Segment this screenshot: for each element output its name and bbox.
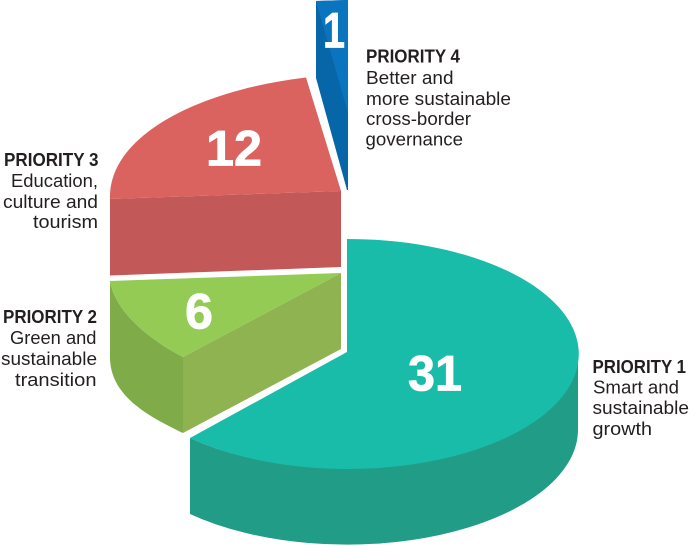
label: priority 3: culture and <box>3 191 98 212</box>
label: priority 3: Education, <box>11 170 98 191</box>
value: 12: 12 <box>206 120 262 176</box>
label: priority 1 <box>592 356 689 439</box>
label: priority 2: transition <box>15 369 96 390</box>
label: priority 4: more sustainable <box>366 88 511 109</box>
label: priority 3: tourism <box>33 211 98 232</box>
label: priority 4 <box>366 46 511 150</box>
pie slice: priority 3 <box>110 78 341 276</box>
value: 1: 1 <box>323 2 345 58</box>
label: priority 2: PRIORITY 2 <box>3 306 97 327</box>
label: priority 1: Smart and <box>593 376 679 398</box>
pie slice: priority 4 <box>316 0 348 190</box>
label: priority 3 <box>3 149 98 232</box>
label: priority 4: Better and <box>366 67 454 88</box>
value: 31: 31 <box>408 346 462 402</box>
label: priority 4: PRIORITY 4 <box>366 46 461 66</box>
label: priority 1: growth <box>592 418 652 439</box>
label: priority 3: PRIORITY 3 <box>4 149 98 170</box>
value: 6: 6 <box>185 284 213 340</box>
label: priority 2 <box>1 306 97 390</box>
label: priority 2: sustainable <box>1 348 97 369</box>
label: priority 1: sustainable <box>592 397 689 418</box>
pie slice: priority 1 <box>190 239 579 545</box>
label: priority 2: Green and <box>10 327 96 348</box>
label: priority 4: cross-border <box>366 108 471 129</box>
pie slice: priority 2 <box>110 273 341 433</box>
label: priority 4: governance <box>366 128 463 150</box>
